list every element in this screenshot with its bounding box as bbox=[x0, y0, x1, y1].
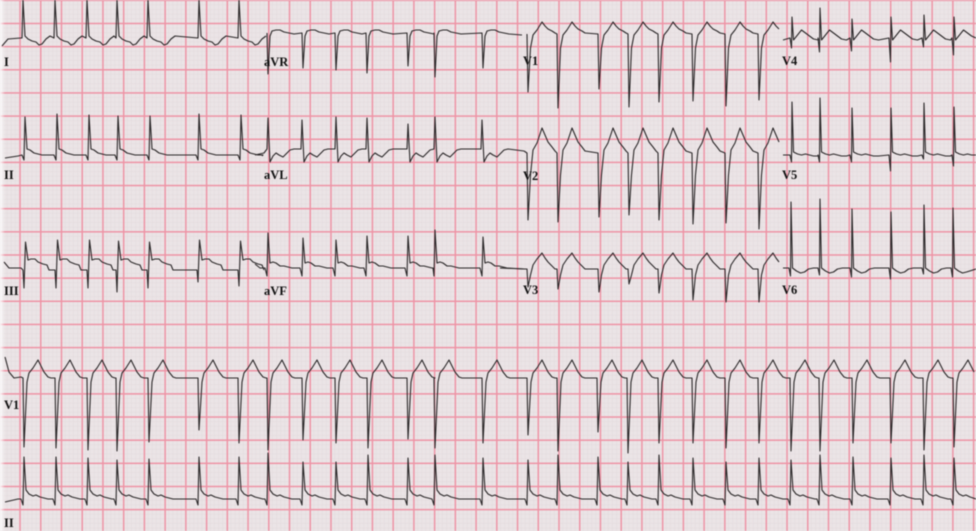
lead V6 trace bbox=[783, 199, 976, 279]
label: rhythm V1: V1 bbox=[4, 398, 19, 412]
lead II trace bbox=[5, 114, 263, 160]
lead V2 trace bbox=[524, 128, 779, 229]
lead V5 trace bbox=[783, 98, 976, 171]
label: I: I bbox=[4, 55, 9, 69]
lead aVL trace bbox=[255, 117, 524, 162]
lead III trace bbox=[4, 240, 264, 292]
lead V4 trace bbox=[783, 8, 976, 62]
lead V3 trace bbox=[500, 253, 779, 302]
rhythm strip V1 trace bbox=[5, 357, 974, 453]
label: aVF: aVF bbox=[264, 284, 287, 298]
rhythm strip II trace bbox=[5, 453, 976, 505]
label: II: II bbox=[4, 168, 14, 182]
label: aVL: aVL bbox=[264, 168, 288, 182]
lead labels bbox=[4, 54, 798, 530]
lead aVF trace bbox=[255, 230, 524, 276]
label: V5: V5 bbox=[782, 168, 797, 182]
label: V2: V2 bbox=[523, 169, 538, 183]
label: V1: V1 bbox=[523, 54, 538, 68]
lead V1 trace bbox=[527, 22, 779, 108]
label: rhythm II: II bbox=[4, 516, 14, 530]
label: aVR: aVR bbox=[264, 55, 289, 69]
lead aVR trace bbox=[267, 30, 522, 77]
lead I trace bbox=[2, 0, 266, 46]
label: III: III bbox=[4, 284, 19, 298]
label: V6: V6 bbox=[782, 283, 797, 297]
label: V3: V3 bbox=[523, 283, 538, 297]
label: V4: V4 bbox=[782, 54, 798, 68]
